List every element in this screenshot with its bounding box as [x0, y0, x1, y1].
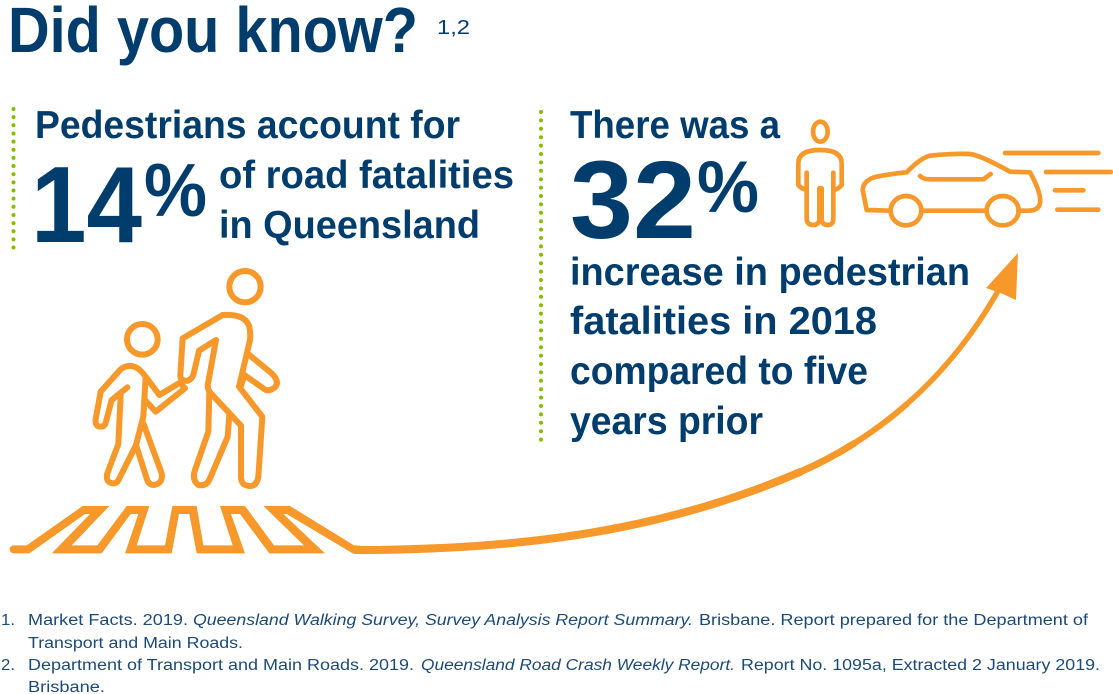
footnotes: Brisbane. Report prepared for the Department of [699, 612, 1089, 629]
footnotes: Report No. 1095a, Extracted 2 January 2019. [741, 657, 1100, 674]
panel: 14% statistic: Pedestrians account for [35, 104, 460, 147]
footnotes: Transport and Main Roads. [28, 635, 243, 652]
panel: 14% statistic: 14 [31, 144, 142, 266]
panel: 32% statistic: increase in pedestrian [570, 251, 970, 294]
panel: 32% statistic: 32 [570, 139, 696, 262]
panel: 14% statistic: in Queensland [219, 204, 480, 247]
panel: 32% statistic: There was a [570, 104, 780, 147]
panel: 32% statistic: years prior [570, 400, 763, 443]
title: 1,2 [437, 17, 470, 39]
footnotes [1, 612, 1100, 694]
icon: standing person [798, 122, 842, 225]
footnotes: 2. [1, 657, 15, 674]
panel: 14% statistic: of road fatalities [219, 154, 514, 197]
panel: 14% statistic: % [144, 148, 207, 232]
footnotes: Queensland Walking Survey, Survey Analysis Report Summary. [193, 612, 693, 629]
panel: 32% statistic: % [697, 147, 759, 228]
footnotes: Queensland Road Crash Weekly Report. [421, 657, 735, 674]
panel: 32% statistic: compared to five [570, 350, 868, 393]
panel: 32% statistic: fatalities in 2018 [570, 300, 877, 343]
panel: 14% statistic [14, 104, 514, 266]
footnotes: Market Facts. 2019. [28, 612, 188, 629]
icon: adult and child walking [96, 271, 277, 486]
footnotes: Department of Transport and Main Roads. 2019. [28, 657, 414, 674]
footnotes: 1. [1, 612, 15, 629]
icon: speeding car [863, 153, 1111, 225]
arrow: rising curve [355, 253, 1018, 550]
panel: 32% statistic [541, 104, 970, 443]
icon: pedestrian crossing [10, 506, 360, 554]
